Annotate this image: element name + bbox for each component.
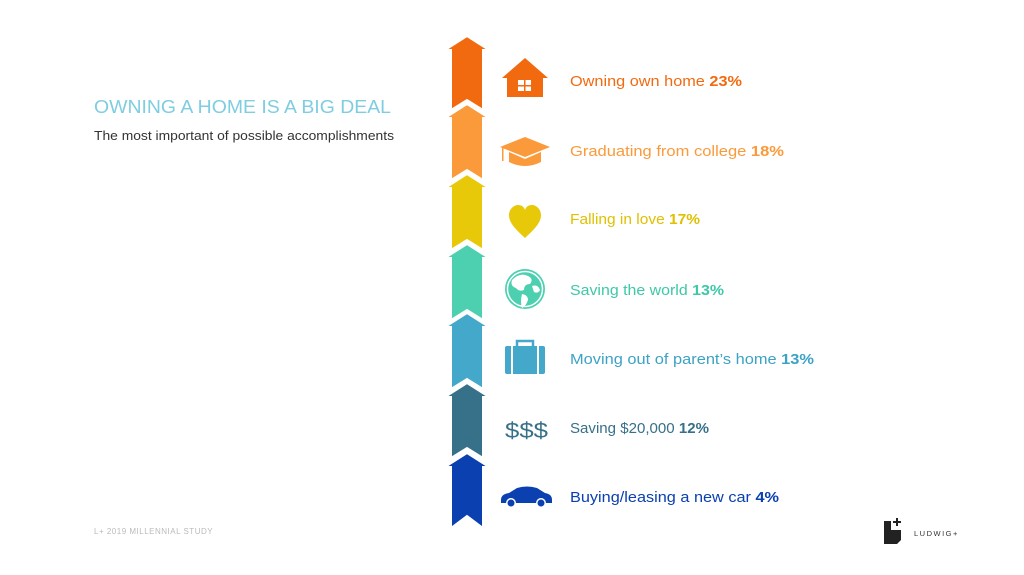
icon: graduation cap [500,137,550,166]
arrow column [445,36,489,528]
icon: car [501,486,552,508]
icon: suitcase [505,341,545,374]
labels: Buying/leasing a new car 4% [570,489,779,506]
labels: Falling in love 17% [570,211,700,228]
labels [570,73,814,506]
labels: Graduating from college 18% [570,143,784,160]
logo: ludwig+ [884,518,959,544]
labels: Saving $20,000 12% [570,420,709,437]
labels: Moving out of parent’s home 13% [570,351,814,368]
icon: house [502,58,548,97]
footer: study label: L+ 2019 MILLENNIAL STUDY [94,527,213,536]
title: OWNING A HOME IS A BIG DEAL [94,96,391,117]
icon: globe [505,269,545,309]
icon: dollars: $$$ [505,418,548,443]
logo: ludwig+: LUDWIG+ [914,529,959,538]
icon: heart [509,205,541,238]
labels: Owning own home 23% [570,73,742,90]
subtitle: The most important of possible accomplishments [94,129,394,143]
labels: Saving the world 13% [570,282,724,299]
